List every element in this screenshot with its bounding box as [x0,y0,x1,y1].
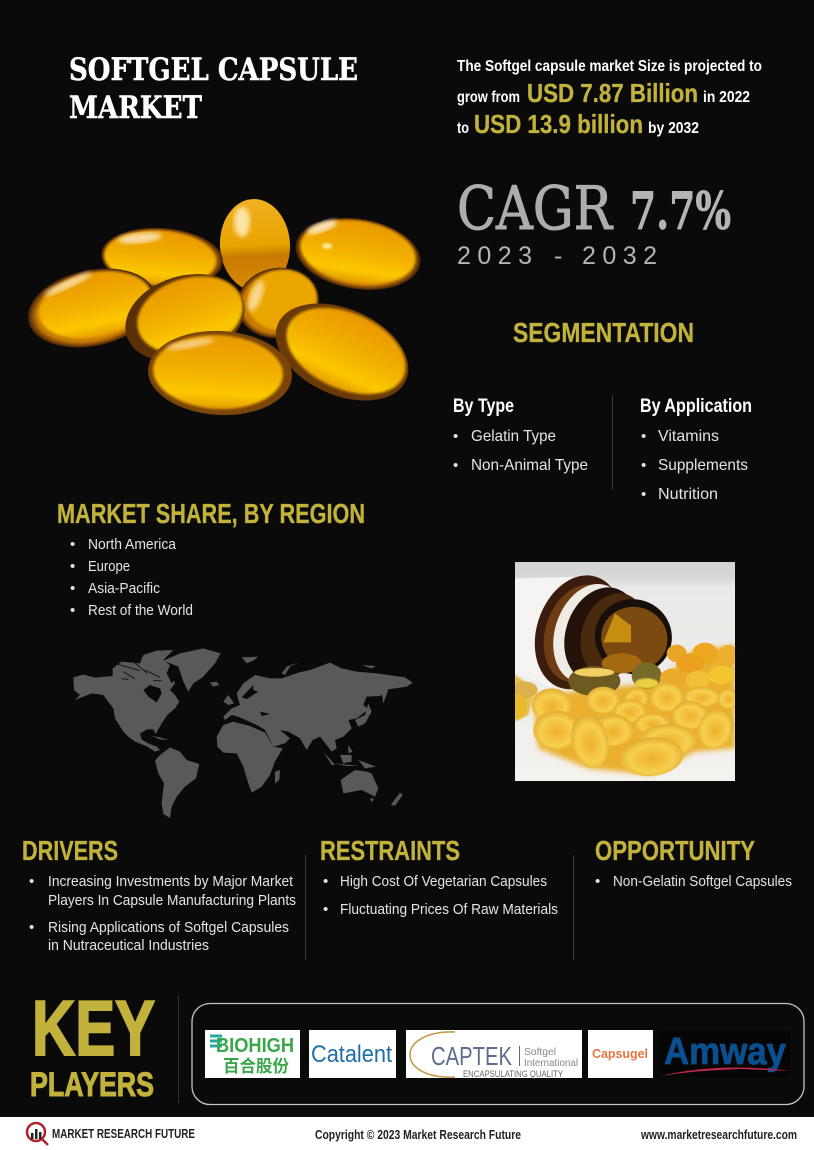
segmentation: by application: Supplements [658,457,748,474]
panel: key player logos [192,1004,804,1104]
segmentation: by application: Nutrition [658,486,718,503]
logo: Biohigh: 百合股份 [223,1056,289,1076]
logo: Capsugel: Capsugel [592,1046,648,1061]
market size statement: USD 13.9 billion [474,109,643,139]
region list: North America [88,536,177,553]
panel: drivers: Rising Applications of Softgel Capsules [48,919,289,936]
market size statement: The Softgel capsule market Size is projected to [457,58,762,75]
CAGR figure: 2032 [582,242,657,270]
region list: • [70,580,75,597]
heading: market share by region: MARKET SHARE, BY REGION [57,498,365,529]
panel: drivers: • [29,873,34,890]
title [69,52,358,126]
heading: key players: KEY [32,984,155,1072]
logo: Capsugel [588,1030,653,1078]
CAGR figure: 7.7% [630,182,731,242]
panel: drivers [22,835,296,954]
logo: Captek: ENCAPSULATING QUALITY [463,1069,563,1079]
CAGR figure: CAGR [457,174,614,244]
photo: softgels spilling from bottle [510,562,739,781]
segmentation: by type: Gelatin Type [471,428,556,445]
footer [0,1117,814,1150]
panel: drivers: DRIVERS [22,835,118,866]
segmentation: by type: Non-Animal Type [471,457,588,474]
heading: key players: PLAYERS [30,1066,154,1104]
world map [73,648,413,818]
heading: key players [30,984,155,1104]
CAGR figure: - [554,242,562,270]
logo: Captek: CAPTEK [431,1041,513,1071]
region list: Europe [88,558,130,575]
panel: opportunity: • [595,873,600,890]
panel: drivers: in Nutraceutical Industries [48,937,209,954]
panel: drivers: Increasing Investments by Major Market [48,873,294,890]
logo: Biohigh [205,1030,300,1078]
panel: restraints: • [323,901,328,918]
logo: Captek: Softgel [524,1047,556,1058]
panel: opportunity [595,835,792,890]
footer: MARKET RESEARCH FUTURE [52,1126,195,1141]
segmentation: by application: • [641,428,646,445]
CAGR figure [457,174,731,270]
market size statement: to [457,120,469,137]
panel: restraints: High Cost Of Vegetarian Capsules [340,873,547,890]
segmentation: by application: Vitamins [658,428,719,445]
panel: restraints: RESTRAINTS [320,835,460,866]
region list [70,536,193,619]
region list: • [70,536,75,553]
title: SOFTGEL CAPSULE [69,52,358,88]
CAGR figure: 2023 [457,242,532,270]
logo: Captek [406,1030,582,1079]
title: MARKET [69,90,202,126]
market size statement [457,58,762,139]
panel: opportunity: Non-Gelatin Softgel Capsules [613,873,792,890]
footer: Copyright © 2023 Market Research Future [315,1127,521,1142]
illustration: softgel capsules [21,197,426,420]
logo: Amway: Amway [664,1031,786,1073]
logo: Catalent: Catalent [311,1041,392,1068]
segmentation: by application: • [641,457,646,474]
logo: Captek: International [524,1058,578,1069]
panel: drivers: • [29,919,34,936]
segmentation: by type: By Type [453,396,514,417]
heading: segmentation: SEGMENTATION [513,317,694,348]
segmentation: by application [640,396,752,503]
segmentation: by application: By Application [640,396,752,417]
region list: Rest of the World [88,602,193,619]
logo: Catalent [309,1030,396,1078]
region list: • [70,558,75,575]
logo: Biohigh: BIOHIGH [216,1035,294,1057]
segmentation: by application: • [641,486,646,503]
segmentation: by type: • [453,457,458,474]
segmentation: by type: • [453,428,458,445]
panel: restraints: Fluctuating Prices Of Raw Materials [340,901,558,918]
market size statement: in 2022 [703,89,750,106]
region list: • [70,602,75,619]
region list: Asia-Pacific [88,580,160,597]
panel: restraints: • [323,873,328,890]
panel: restraints [320,835,558,918]
market size statement: USD 7.87 Billion [527,78,698,108]
segmentation: by type [453,396,588,474]
panel: opportunity: OPPORTUNITY [595,835,755,866]
market size statement: grow from [457,89,520,106]
icon: magnifier logo [27,1123,48,1145]
panel: drivers: Players In Capsule Manufacturing Plants [48,892,296,909]
market size statement: by 2032 [648,120,699,137]
